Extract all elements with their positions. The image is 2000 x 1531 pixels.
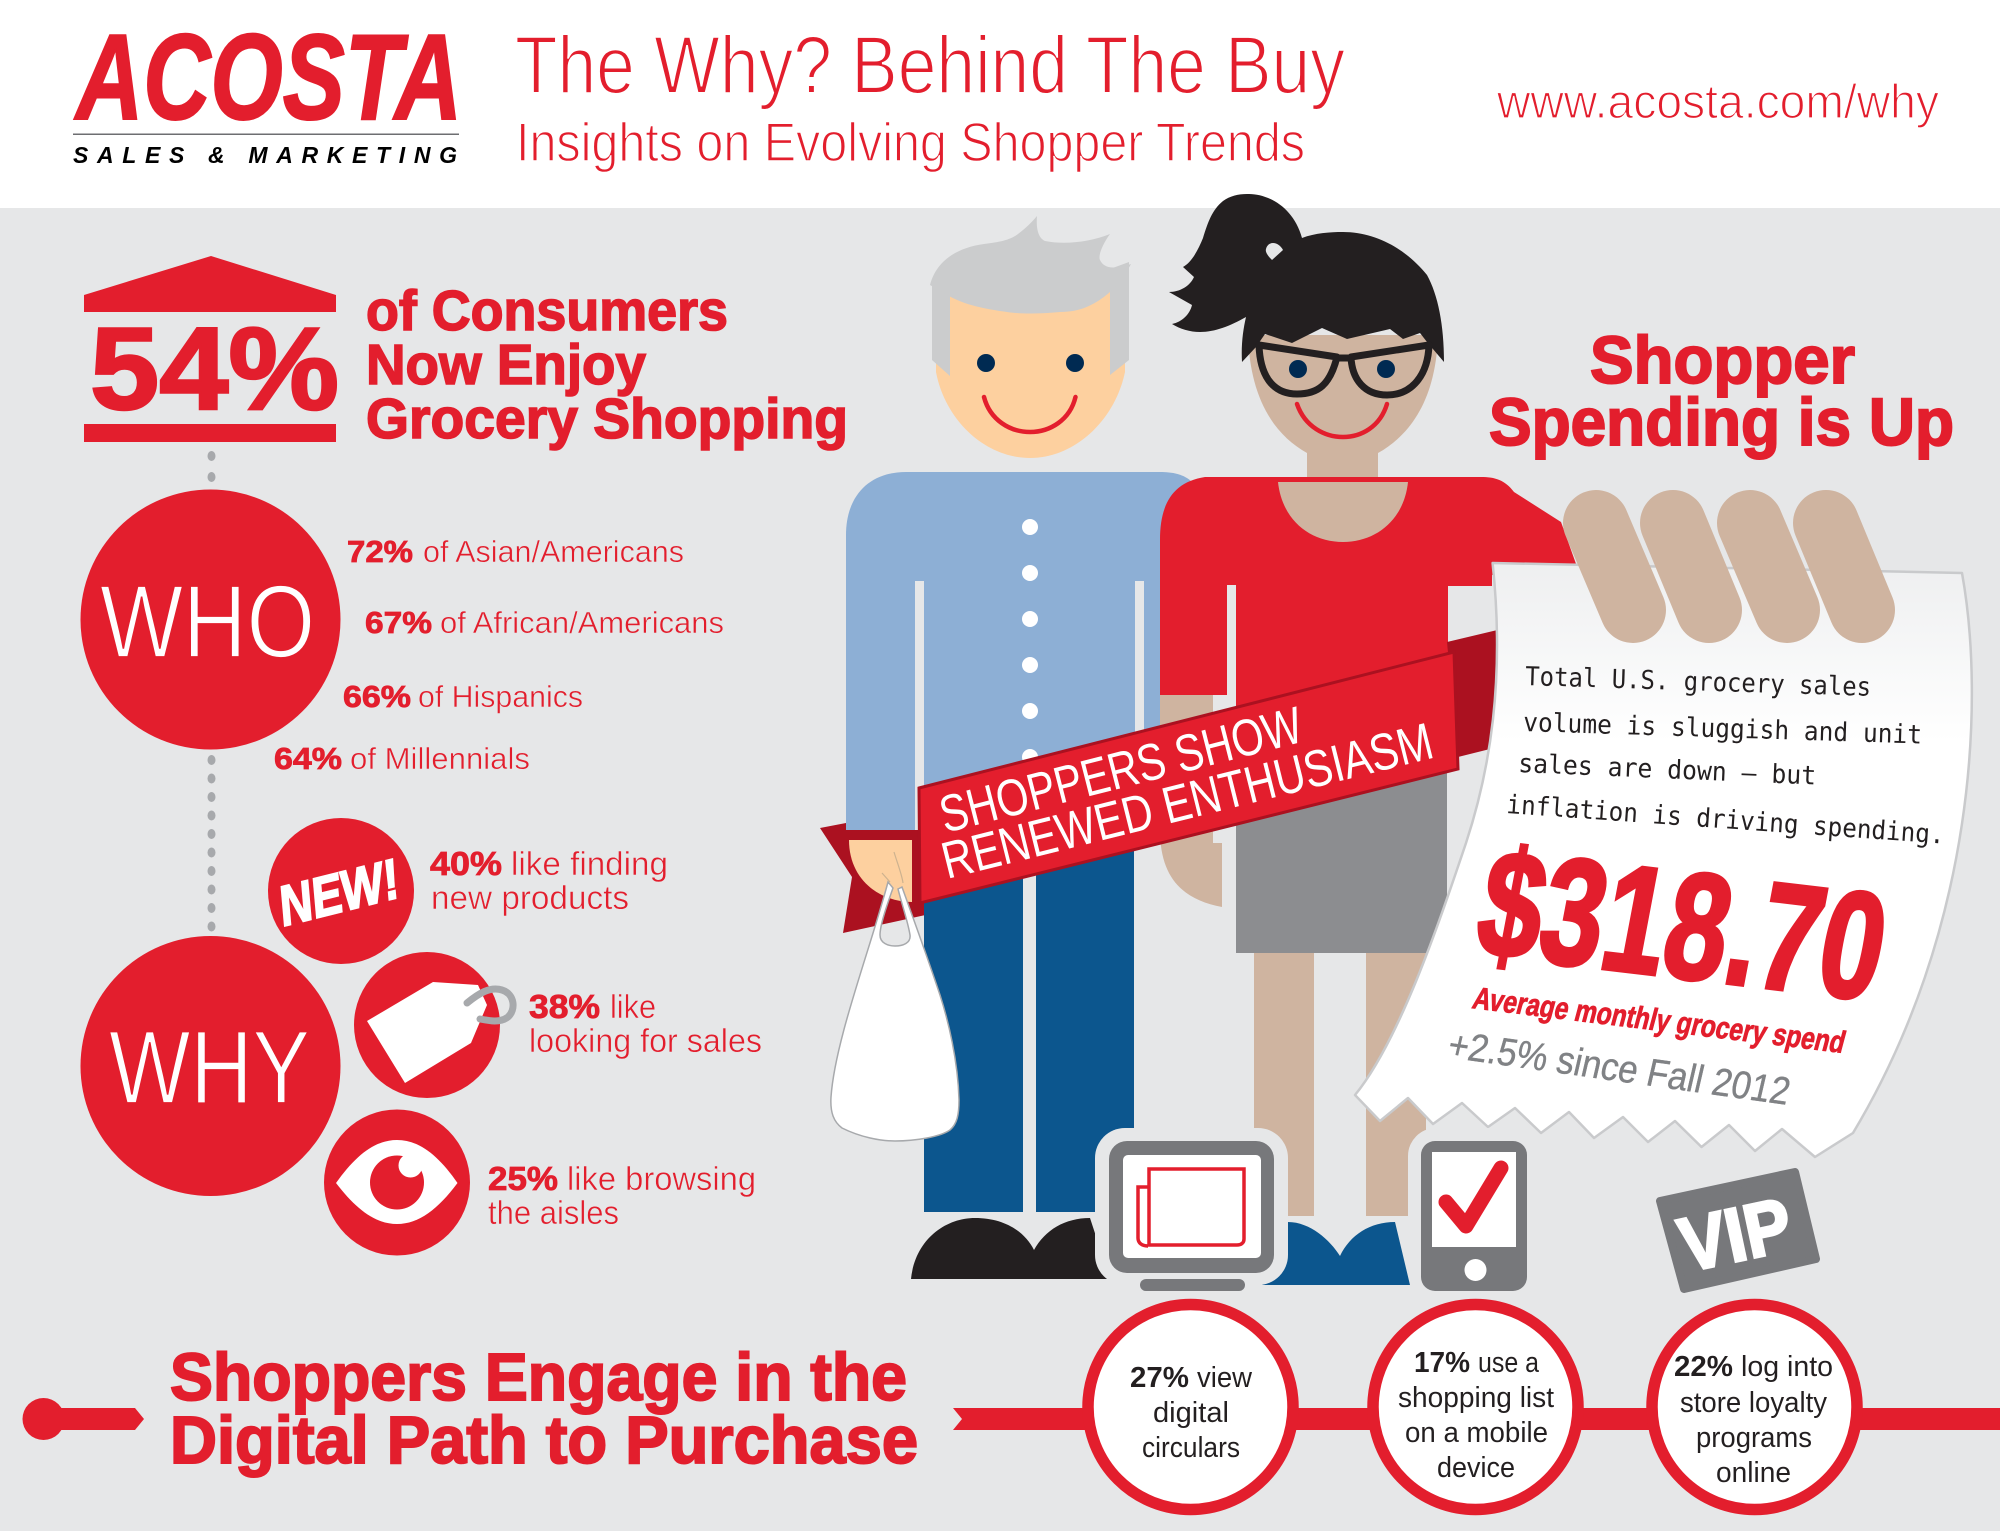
hand (849, 840, 912, 902)
panel: why (80, 818, 762, 1256)
callout: 22 percent store loyalty (1652, 1304, 1857, 1510)
ribbon banner (919, 652, 1458, 903)
receipt (1355, 563, 1972, 1157)
stat: 67 percent: of African/Americans (440, 605, 724, 640)
man figure (846, 216, 1192, 1279)
timeline bar (953, 1408, 2000, 1430)
callout: 17 percent mobile shopping list: use a (1478, 1347, 1540, 1379)
icon: monitor with circular (1095, 1128, 1288, 1291)
callout: 27 percent digital circulars: circulars (1142, 1432, 1240, 1464)
eyes (1289, 360, 1395, 378)
who circle (80, 490, 340, 750)
receipt body text: Total U.S. grocery sales (1525, 662, 1872, 703)
icon: price tag (354, 952, 513, 1098)
glasses (1259, 345, 1429, 395)
callout: 22 percent store loyalty: log into (1741, 1351, 1833, 1383)
shoes (911, 1218, 1110, 1279)
stat: 38 percent (529, 988, 762, 1059)
callout: 22 percent store loyalty: 22% (1674, 1351, 1733, 1383)
legs (1254, 940, 1426, 1216)
spend caption: Average monthly grocery spend (1469, 981, 1850, 1060)
smile (1297, 404, 1387, 437)
callout: 22 percent store loyalty: programs (1696, 1422, 1812, 1454)
who circle: WHO (100, 564, 315, 679)
icon: new badge: NEW! (272, 847, 405, 938)
stat: 72 percent: 72% (347, 534, 413, 569)
stat: 66 percent (343, 679, 583, 714)
skirt (1236, 760, 1447, 953)
heading: of consumers now enjoy grocery shopping: Grocery Shopping (366, 387, 848, 451)
stat: 40 percent: new products (431, 879, 629, 916)
receipt body text: sales are down – but (1518, 749, 1817, 791)
ribbon tail right (1447, 627, 1510, 757)
heading: shopper spending is up (1489, 323, 1954, 460)
heading: of consumers now enjoy grocery shopping: of Consumers (366, 279, 728, 343)
logo: ACOSTA (74, 9, 462, 145)
panel: who (80, 490, 724, 776)
heading: of consumers now enjoy grocery shopping: Now Enjoy (366, 333, 646, 397)
website url: www.acosta.com/why (1496, 76, 1939, 129)
callout: 17 percent mobile shopping list: on a mobile (1405, 1417, 1548, 1449)
panel: digital path heading (22, 1340, 918, 1478)
callout: 17 percent mobile shopping list: 17% (1414, 1347, 1470, 1379)
logo (73, 9, 462, 168)
callout: 17 percent mobile shopping list: shopping list (1398, 1382, 1554, 1414)
why circle: WHY (109, 1010, 310, 1126)
stat: 40 percent: 40% (430, 845, 502, 882)
stat: 67 percent: 67% (365, 605, 432, 640)
stat: 38 percent: looking for sales (529, 1022, 762, 1059)
neck (1307, 440, 1378, 490)
hair and ponytail (1169, 194, 1444, 362)
shopping bag (831, 882, 959, 1141)
hair (930, 216, 1131, 314)
receipt paper (1355, 563, 1972, 1157)
stat: 66 percent: 66% (343, 679, 411, 714)
stat: 40 percent (430, 845, 668, 916)
stat: 72 percent: of Asian/Americans (423, 534, 684, 569)
stat: 25 percent: the aisles (488, 1194, 619, 1231)
icon: eye (324, 1110, 470, 1256)
icon: new badge (268, 818, 414, 964)
shirt (846, 472, 1192, 842)
dotted connector (208, 451, 216, 932)
stat: 25 percent: 25% (488, 1160, 558, 1197)
face (936, 280, 1125, 458)
hand fingers (1596, 523, 1862, 610)
stat: 64 percent: of Millennials (350, 741, 530, 776)
heading: shoppers engage in the digital path to purchase: Digital Path to Purchase (170, 1403, 918, 1478)
heading: shopper spending is up: Spending is Up (1489, 385, 1954, 460)
red top (1160, 477, 1580, 768)
stat: 38 percent: 38% (529, 988, 600, 1025)
heading: shoppers engage in the digital path to purchase (170, 1340, 918, 1478)
ribbon tail left (820, 810, 930, 933)
smile (984, 397, 1076, 432)
callout: 17 percent mobile shopping list (1373, 1304, 1578, 1510)
ribbon banner: SHOPPERS SHOW (934, 697, 1308, 845)
change since fall 2012: +2.5% since Fall 2012 (1444, 1024, 1794, 1114)
icon: vip card: VIP (1672, 1182, 1799, 1289)
callout: 22 percent store loyalty: online (1716, 1457, 1791, 1489)
panel: 54 percent enjoy shopping (84, 256, 848, 451)
subtitle: Insights on Evolving Shopper Trends (516, 111, 1305, 173)
eyes (977, 354, 1084, 372)
why circle (80, 936, 340, 1196)
heading: shopper spending is up: Shopper (1590, 323, 1855, 398)
icon: phone with check mark (1408, 1128, 1540, 1300)
callout: 27 percent digital circulars: view (1197, 1362, 1253, 1394)
left arm (1160, 690, 1222, 907)
callout: 17 percent mobile shopping list: device (1437, 1452, 1515, 1484)
callout: 27 percent digital circulars: 27% (1130, 1362, 1189, 1394)
callout: 27 percent digital circulars: digital (1153, 1397, 1229, 1429)
callout: 22 percent store loyalty: store loyalty (1680, 1387, 1827, 1419)
heading: of consumers now enjoy grocery shopping (366, 279, 848, 451)
hair tie (1266, 243, 1283, 260)
shoes (1262, 1222, 1410, 1285)
logo: SALES & MARKETING (73, 142, 457, 168)
callout: 27 percent digital circulars (1088, 1304, 1293, 1510)
trousers (924, 780, 1134, 1212)
stat: 40 percent: like finding (511, 845, 668, 882)
heading: shoppers engage in the digital path to purchase: Shoppers Engage in the (170, 1340, 907, 1415)
neckline (1278, 482, 1408, 542)
stat: 64 percent: 64% (274, 741, 342, 776)
sideburns (932, 262, 1129, 376)
head (1248, 335, 1438, 453)
stat: 25 percent: like browsing (567, 1160, 756, 1197)
ribbon banner: RENEWED ENTHUSIASM (936, 712, 1439, 891)
icon: pin arrow (22, 1398, 144, 1440)
title: The Why? Behind The Buy (515, 20, 1345, 111)
icon: store roof and base (84, 256, 336, 442)
woman figure (1160, 194, 1580, 1285)
big stat 54%: 54% (90, 303, 339, 434)
header band (0, 0, 2000, 208)
stat: 66 percent: of Hispanics (418, 679, 583, 714)
receipt body text: volume is sluggish and unit (1523, 708, 1923, 751)
receipt body text: inflation is driving spending. (1506, 790, 1946, 851)
stat: 25 percent (488, 1160, 756, 1231)
receipt body text (1506, 662, 1946, 851)
stat: 38 percent: like (610, 988, 656, 1025)
